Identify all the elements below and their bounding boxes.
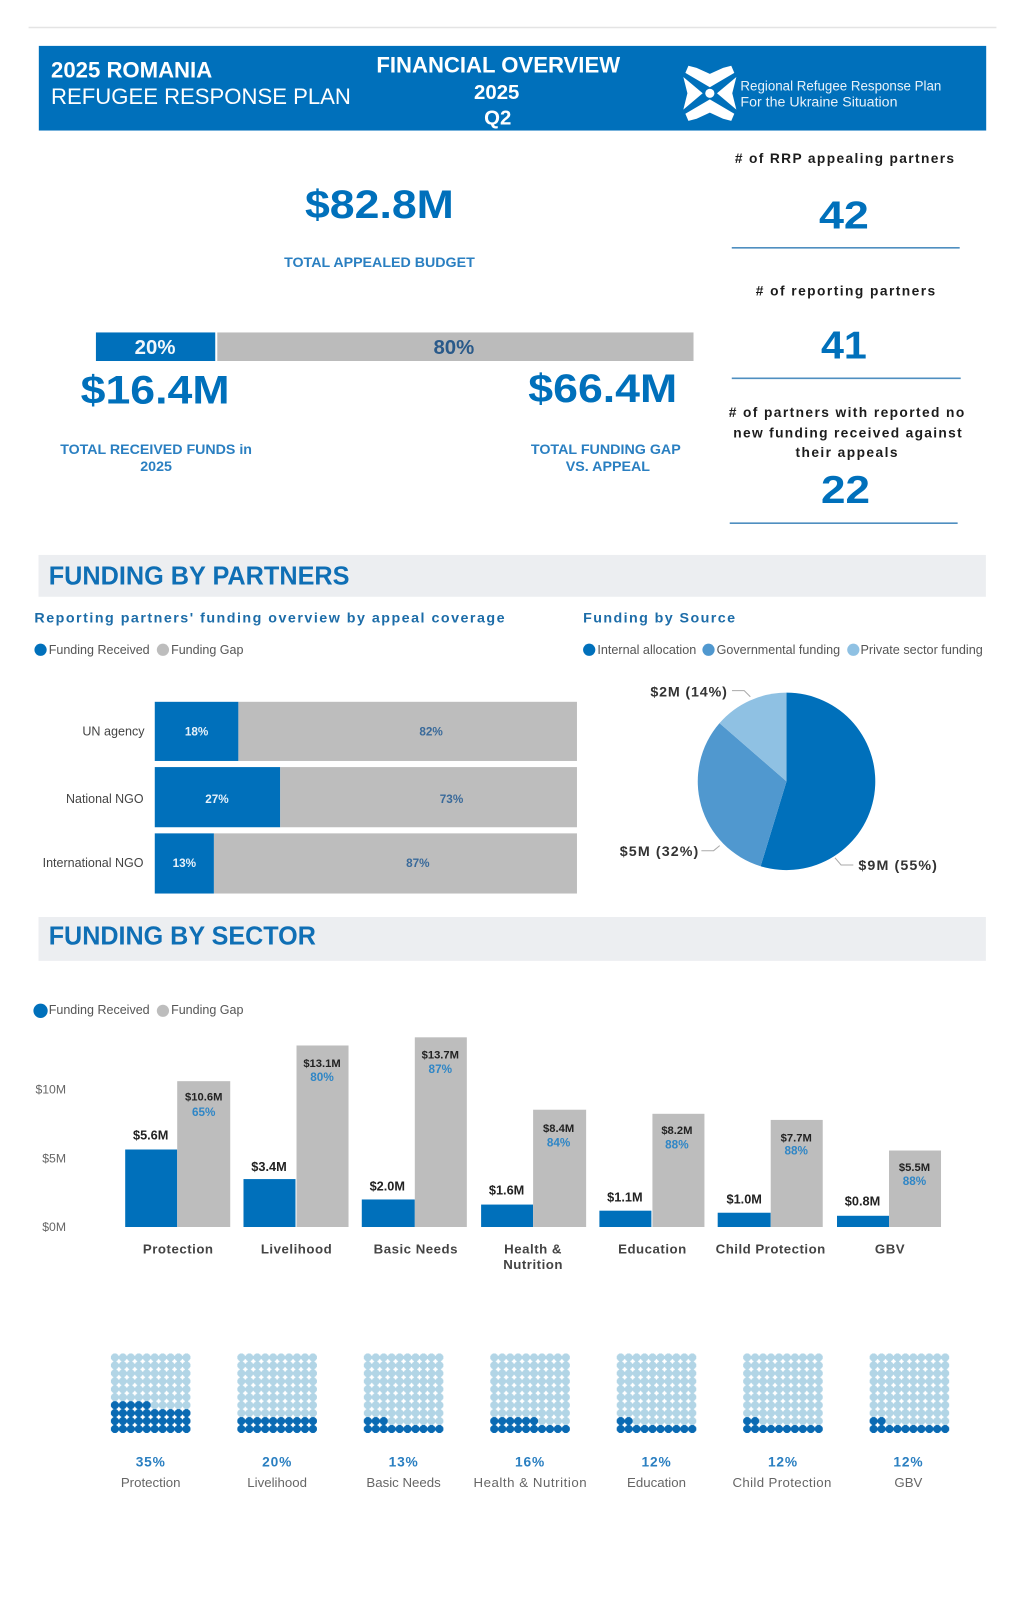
waffle: health and nutrition 16%: Health & Nutrition xyxy=(473,1475,587,1490)
chart heading: Reporting partners' funding overview by appeal coverage xyxy=(34,610,505,626)
stacked bars: UN agency xyxy=(82,723,145,738)
legend xyxy=(34,642,243,657)
bars: education: $8.2M xyxy=(661,1125,692,1137)
bar chart: funding by sector xyxy=(35,1037,941,1272)
panel: total funding gap: VS. APPEAL xyxy=(566,459,650,475)
progress bar: received vs gap xyxy=(96,332,694,361)
panel: total funding gap: TOTAL FUNDING GAP xyxy=(531,442,681,458)
panel: total received funds xyxy=(60,368,252,475)
waffle: protection 35%: 35% xyxy=(136,1455,166,1470)
bars: basic needs: 87% xyxy=(429,1063,453,1076)
bars: gbv: $0.8M xyxy=(845,1194,880,1209)
waffle: education 12%: Education xyxy=(627,1475,686,1490)
bars: protection xyxy=(125,1081,230,1257)
title: financial overview period: 2025 xyxy=(474,82,519,104)
panel: partner coverage chart xyxy=(34,610,577,894)
bars: gbv xyxy=(837,1151,941,1257)
bars: health and nutrition: Nutrition xyxy=(503,1257,563,1272)
panel: total received funds: 2025 xyxy=(140,459,172,475)
stacked bars: National NGO xyxy=(66,791,144,806)
waffle: basic needs 13%: Basic Needs xyxy=(366,1475,441,1490)
legend: Funding Gap xyxy=(171,642,243,657)
pie chart: $9M (55%) xyxy=(858,858,937,874)
legend xyxy=(583,642,983,657)
legend: Governmental funding xyxy=(717,642,840,657)
bars: education: Education xyxy=(618,1242,687,1257)
pie chart: $2M (14%) xyxy=(650,685,727,701)
waffle: basic needs 13% xyxy=(364,1353,443,1490)
waffle: livelihood 20%: 20% xyxy=(262,1455,292,1470)
heading: funding by partners xyxy=(39,555,986,597)
waffle: livelihood 20% xyxy=(237,1353,317,1490)
panel: funding by source xyxy=(583,610,983,874)
bars: education xyxy=(599,1114,704,1257)
stat: partners with no new funding: their appeals xyxy=(795,445,898,460)
bars: protection: $10.6M xyxy=(185,1092,222,1104)
stat: reporting partners xyxy=(732,284,961,378)
waffle: child protection 12%: Child Protection xyxy=(732,1475,831,1490)
stat: partners with no new funding xyxy=(729,405,964,523)
stacked bars: 82% xyxy=(419,725,443,738)
logo text: Regional Refugee Response Plan xyxy=(740,78,941,94)
panel: total appealed budget: TOTAL APPEALED BUDGET xyxy=(284,255,475,271)
bars: basic needs: $2.0M xyxy=(370,1178,405,1193)
bars: child protection: Child Protection xyxy=(716,1242,826,1257)
pie chart: $5M (32%) xyxy=(620,844,699,860)
stacked bars xyxy=(43,702,577,894)
stat: appealing partners: 42 xyxy=(819,194,869,237)
panel: waffle charts by sector xyxy=(111,1353,949,1490)
bars: basic needs xyxy=(362,1037,467,1257)
title: plan name: 2025 ROMANIA xyxy=(51,58,212,83)
stacked bars: International NGO xyxy=(43,855,144,870)
legend: Internal allocation xyxy=(597,642,696,657)
stat: appealing partners: # of RRP appealing partners xyxy=(735,151,954,166)
stat: partners with no new funding: new funding received against xyxy=(733,425,962,440)
y axis labels: $5M xyxy=(42,1152,66,1166)
chart heading: Funding by Source xyxy=(583,610,735,626)
legend: funding by sector: Funding Received xyxy=(49,1002,150,1017)
stat: partners with no new funding: # of partners with reported no xyxy=(729,405,964,420)
stat: reporting partners: 41 xyxy=(821,324,867,367)
heading: funding by sector: FUNDING BY SECTOR xyxy=(49,923,316,951)
bars: gbv: GBV xyxy=(875,1242,905,1257)
bars: livelihood: Livelihood xyxy=(261,1242,332,1257)
bars: child protection: 88% xyxy=(784,1145,809,1158)
stat: partners with no new funding: 22 xyxy=(821,469,870,512)
waffle: education 12%: 12% xyxy=(642,1455,671,1470)
bars: education: $1.1M xyxy=(607,1190,643,1205)
stacked bars: 27% xyxy=(205,793,229,806)
bars: child protection: $1.0M xyxy=(727,1192,762,1207)
y axis labels xyxy=(35,1082,66,1234)
bars: livelihood: 80% xyxy=(310,1071,334,1084)
bars: protection: Protection xyxy=(143,1242,214,1257)
panel: total received funds: TOTAL RECEIVED FUNDS in xyxy=(60,442,252,458)
panel: total funding gap xyxy=(528,367,681,475)
bars: protection: 65% xyxy=(192,1106,216,1119)
progress bar: received vs gap: 20% xyxy=(135,337,175,359)
pie chart xyxy=(620,685,937,874)
bars: livelihood: $3.4M xyxy=(251,1159,287,1174)
waffle: health and nutrition 16%: 16% xyxy=(515,1455,545,1470)
panel: total received funds: $16.4M xyxy=(81,368,230,412)
bars: gbv: $5.5M xyxy=(899,1162,930,1174)
waffle: child protection 12%: 12% xyxy=(768,1455,798,1470)
bars: livelihood: $13.1M xyxy=(303,1058,341,1070)
bars: health and nutrition: $1.6M xyxy=(489,1182,524,1197)
bars: health and nutrition: 84% xyxy=(547,1136,571,1149)
bars: basic needs: $13.7M xyxy=(422,1050,459,1062)
panel: total appealed budget: $82.8M xyxy=(305,183,454,227)
title: financial overview period xyxy=(376,52,621,129)
y axis labels: $0M xyxy=(42,1220,66,1234)
legend: funding by sector: Funding Gap xyxy=(171,1002,243,1017)
title: plan name xyxy=(51,58,351,109)
stacked bars: 18% xyxy=(185,725,209,738)
stacked bars: 87% xyxy=(406,857,430,870)
legend: Private sector funding xyxy=(860,642,983,657)
header banner xyxy=(39,46,986,131)
title: plan name: REFUGEE RESPONSE PLAN xyxy=(51,84,351,109)
bars: health and nutrition xyxy=(481,1110,586,1272)
legend: Funding Received xyxy=(49,642,150,657)
title: financial overview period: FINANCIAL OVERVIEW xyxy=(376,52,621,77)
waffle: protection 35%: Protection xyxy=(121,1475,181,1490)
stat: appealing partners xyxy=(732,151,960,248)
panel: partner counts xyxy=(729,151,964,523)
panel: total funding gap: $66.4M xyxy=(528,367,677,411)
logo text xyxy=(740,78,941,111)
waffle: basic needs 13%: 13% xyxy=(389,1455,419,1470)
bars: health and nutrition: $8.4M xyxy=(543,1123,574,1135)
bars: child protection xyxy=(716,1120,826,1257)
waffle: protection 35% xyxy=(111,1353,190,1490)
waffle: gbv 12% xyxy=(870,1353,949,1490)
progress bar: received vs gap: 80% xyxy=(433,337,474,359)
icon: regional refugee response plan logo xyxy=(683,66,736,121)
bars: livelihood xyxy=(243,1045,349,1257)
bars: health and nutrition: Health & xyxy=(504,1242,562,1257)
waffle: livelihood 20%: Livelihood xyxy=(247,1475,307,1490)
y axis labels: $10M xyxy=(35,1082,66,1096)
legend: funding by sector xyxy=(33,1002,243,1018)
waffle: gbv 12%: GBV xyxy=(894,1475,923,1490)
waffle: education 12% xyxy=(617,1353,696,1490)
bars: child protection: $7.7M xyxy=(781,1132,812,1144)
bars: basic needs: Basic Needs xyxy=(374,1242,458,1257)
heading: funding by partners: FUNDING BY PARTNERS xyxy=(49,563,350,591)
heading: funding by sector xyxy=(39,917,986,961)
stat: reporting partners: # of reporting partners xyxy=(756,284,936,299)
panel: total appealed budget xyxy=(284,183,475,271)
bars: education: 88% xyxy=(665,1138,689,1151)
bars: protection: $5.6M xyxy=(133,1127,168,1142)
stacked bars: 13% xyxy=(173,857,197,870)
stacked bars: 73% xyxy=(440,793,464,806)
bars: gbv: 88% xyxy=(903,1175,927,1188)
logo text: For the Ukraine Situation xyxy=(740,95,897,111)
title: financial overview period: Q2 xyxy=(484,107,511,129)
waffle: gbv 12%: 12% xyxy=(893,1455,923,1470)
waffle: child protection 12% xyxy=(732,1353,831,1490)
waffle: health and nutrition 16% xyxy=(473,1353,587,1490)
